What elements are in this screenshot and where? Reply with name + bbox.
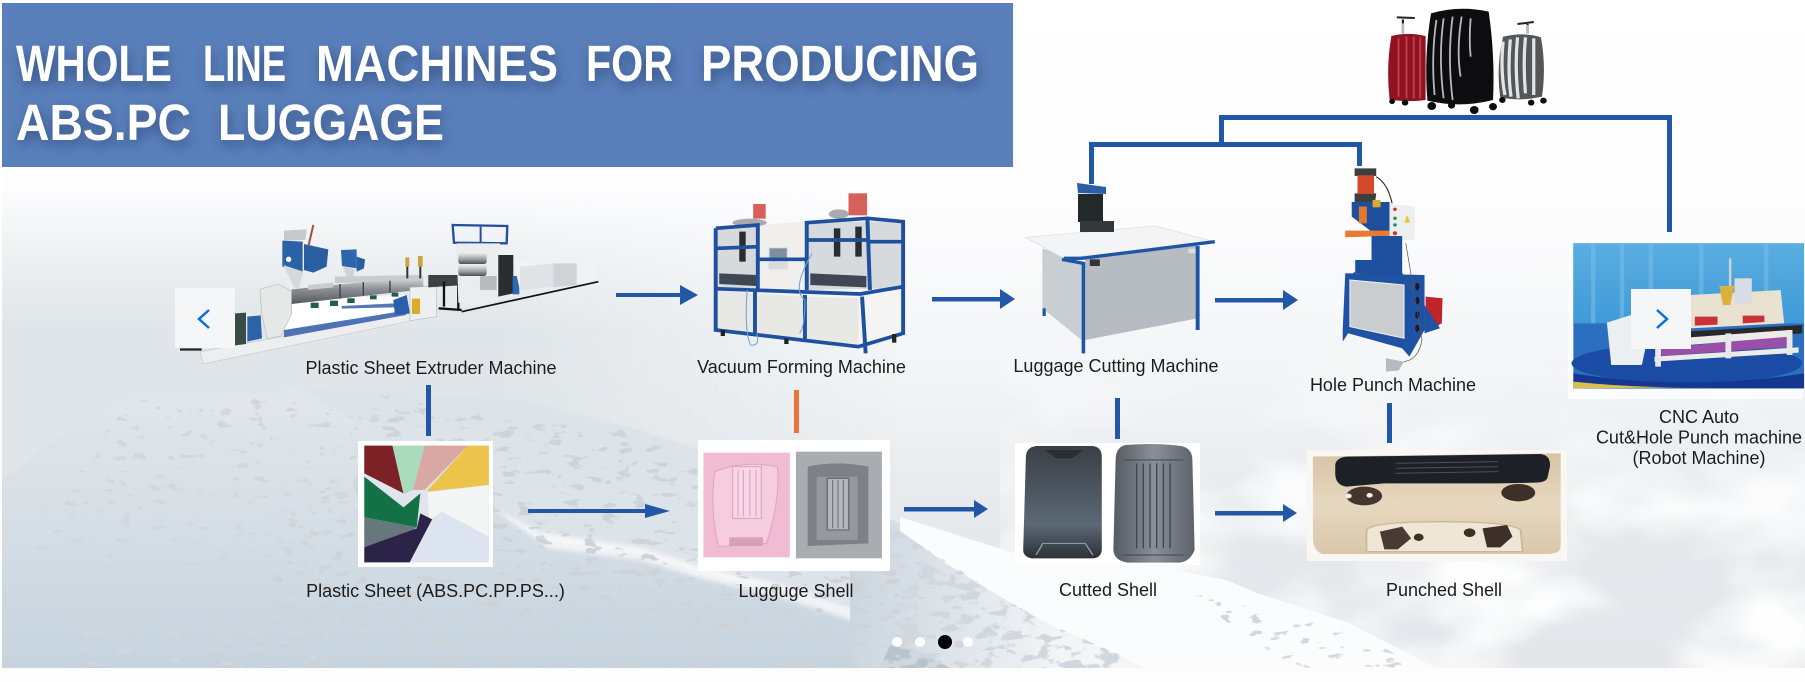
title banner xyxy=(2,3,1013,167)
image: punched shell xyxy=(1307,450,1567,561)
label: punched shell: Punched Shell xyxy=(1386,580,1502,600)
label: cutted shell: Cutted Shell xyxy=(1059,580,1157,600)
title text: PRODUCING xyxy=(701,35,979,92)
label: vacuum forming machine: Vacuum Forming Machine xyxy=(697,357,906,377)
machine: CNC robot xyxy=(1568,237,1804,399)
connector lines to luggage xyxy=(1089,115,1672,232)
label: CNC auto cut and hole punch machine: Cut&Hole Punch machine xyxy=(1596,428,1802,448)
image: luggage shell xyxy=(698,440,890,571)
title text: LINE xyxy=(203,35,286,92)
title text: FOR xyxy=(586,35,673,92)
carousel next button xyxy=(1631,289,1691,349)
image: cutted shell xyxy=(1015,443,1200,565)
label: luggage cutting machine: Luggage Cutting Machine xyxy=(1013,356,1219,376)
title text: MACHINES xyxy=(316,35,558,92)
process arrows xyxy=(528,285,1298,522)
label: hole punch machine: Hole Punch Machine xyxy=(1310,375,1476,395)
background: snowy mountain and clouds xyxy=(2,212,1805,668)
machine: cutting head xyxy=(1077,183,1114,232)
image: plastic sheet samples xyxy=(358,441,493,567)
title text xyxy=(16,35,979,151)
title text: LUGGAGE xyxy=(218,94,444,151)
title text: ABS.PC xyxy=(16,94,191,151)
title text: WHOLE xyxy=(16,35,172,92)
machine: hole punch xyxy=(1343,168,1443,372)
vertical connector bars xyxy=(426,385,1392,443)
machine: vacuum forming xyxy=(716,193,903,353)
label: plastic sheet extruder machine: Plastic Sheet Extruder Machine xyxy=(305,358,557,378)
machine: luggage cutting table xyxy=(1026,226,1215,353)
carousel dots xyxy=(892,635,973,649)
label: CNC auto cut and hole punch machine: CNC Auto xyxy=(1659,407,1739,427)
label: lugguge shell: Lugguge Shell xyxy=(738,581,854,601)
carousel previous button xyxy=(175,288,235,348)
icon: three suitcases xyxy=(1388,9,1547,114)
bottom margin strip xyxy=(0,668,1805,682)
machine: plastic sheet extruder xyxy=(180,225,598,364)
label: CNC auto cut and hole punch machine: (Robot Machine) xyxy=(1632,448,1766,468)
label: plastic sheet: Plastic Sheet (ABS.PC.PP.PS...) xyxy=(306,581,565,601)
rock texture xyxy=(260,400,900,668)
